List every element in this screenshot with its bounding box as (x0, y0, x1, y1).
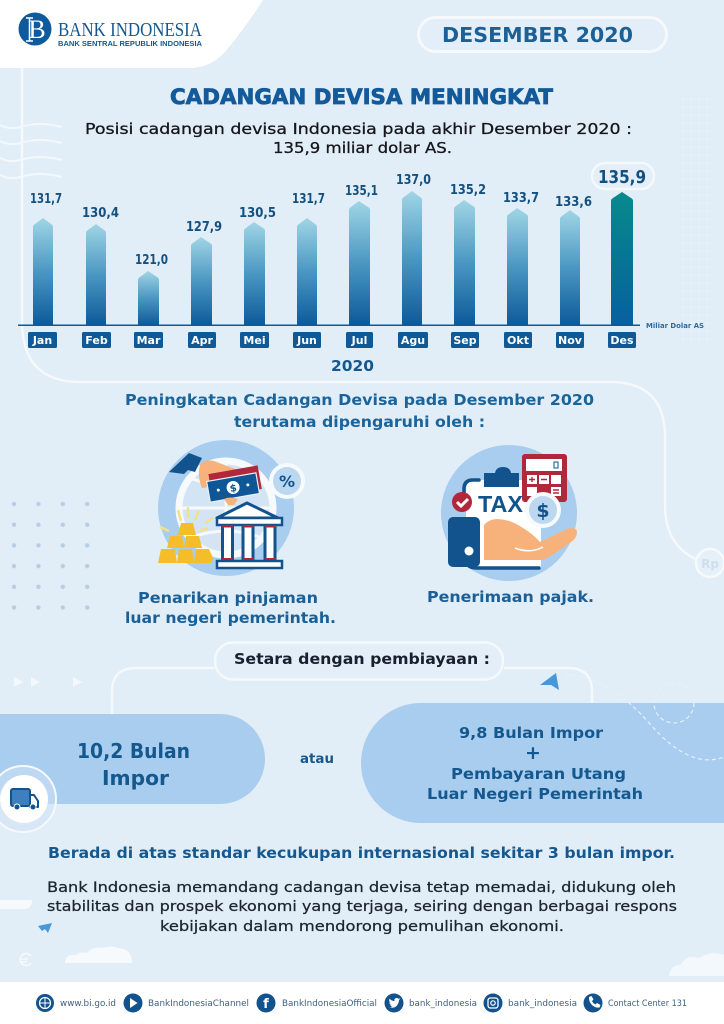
bars (33, 191, 633, 325)
sleeve (169, 453, 202, 474)
label: government loan: Penarikan pinjaman (138, 589, 318, 607)
contact center: Contact Center 131 (608, 999, 687, 1009)
value labels (30, 172, 592, 268)
icon: paper plane (540, 673, 559, 690)
axis (18, 324, 640, 326)
subtitle: Posisi cadangan devisa Indonesia pada akhir Desember 2020 : (85, 120, 632, 138)
panel: 10.2 months (0, 714, 265, 804)
gold shine (160, 507, 213, 531)
value labels: 130,4 (82, 205, 119, 221)
dashed flight path (565, 674, 724, 760)
header logo panel (0, 0, 263, 68)
youtube: BankIndonesiaChannel (148, 999, 249, 1009)
facebook (256, 994, 377, 1012)
month labels: Des (610, 334, 634, 347)
closing paragraph: Bank Indonesia memandang cadangan devisa tetap memadai, didukung oleh (47, 880, 676, 896)
panel: 9.8 months plus debt: + (525, 742, 541, 764)
financing heading pill (215, 642, 503, 680)
panel: 9.8 months plus debt: Pembayaran Utang (451, 765, 626, 783)
value labels: 121,0 (135, 252, 168, 268)
hand (484, 519, 577, 560)
panel: 10.2 months: Impor (102, 766, 169, 790)
or label: atau (300, 752, 334, 767)
website: www.bi.go.id (60, 999, 116, 1009)
panel: 9.8 months plus debt (361, 703, 724, 823)
icon: tax revenue (441, 445, 577, 581)
closing paragraph: kebijakan dalam mendorong pemulihan ekonomi. (160, 919, 564, 935)
subtitle (85, 120, 632, 157)
instagram: bank_indonesia (508, 999, 577, 1009)
month labels: Okt (507, 334, 529, 347)
panel: 10.2 months: 10,2 Bulan (77, 739, 190, 763)
month labels: Jan (32, 334, 52, 347)
banknote: $ (229, 483, 238, 495)
value labels: 127,9 (186, 219, 222, 235)
panel: 9.8 months plus debt: 9,8 Bulan Impor (459, 724, 603, 742)
subtitle: 135,9 miliar dolar AS. (273, 139, 452, 157)
bar chart (18, 163, 704, 375)
twitter: bank_indonesia (409, 999, 477, 1009)
label: tax revenue: Penerimaan pajak. (427, 588, 594, 606)
gold bars (158, 523, 213, 563)
month labels (28, 332, 636, 348)
section heading: Peningkatan Cadangan Devisa pada Desember 2020 (125, 391, 594, 409)
footer (0, 982, 724, 1024)
date badge (418, 18, 666, 52)
value labels: 133,7 (503, 190, 539, 206)
month labels: Nov (558, 334, 583, 347)
icon: Bank Indonesia logo (18, 12, 52, 46)
value labels: 131,7 (30, 191, 62, 207)
icon: tax revenue: $ (536, 500, 550, 522)
icon: government loan: % (279, 472, 295, 491)
axis unit: Miliar Dolar AS (646, 322, 704, 330)
panel: 9.8 months plus debt: Luar Negeri Pemerintah (427, 785, 643, 803)
facebook: BankIndonesiaOfficial (282, 999, 377, 1009)
title: CADANGAN DEVISA MENINGKAT (170, 85, 554, 109)
closing paragraph: stabilitas dan prospek ekonomi yang terjaga, seiring dengan berbagai respons (47, 899, 677, 915)
month labels: Apr (191, 334, 213, 347)
value labels: 135,2 (450, 182, 486, 198)
adequacy statement: Berada di atas standar kecukupan internasional sekitar 3 bulan impor. (48, 844, 675, 862)
cuff (448, 517, 480, 567)
year label: 2020 (331, 357, 374, 375)
value labels: 130,5 (239, 205, 276, 221)
website (36, 994, 116, 1012)
hand (199, 460, 246, 488)
month labels: Feb (85, 334, 108, 347)
section heading (125, 391, 594, 431)
youtube (124, 994, 249, 1012)
label: government loan (125, 589, 336, 627)
instagram (484, 994, 577, 1012)
icon: government loan (158, 440, 305, 576)
TAX word: TAX (478, 491, 524, 517)
connector lines (22, 68, 700, 714)
logo wordmark: BANK INDONESIA (58, 20, 202, 41)
icon: rupiah coin (696, 549, 724, 577)
month labels: Agu (401, 334, 425, 347)
percent badge (269, 463, 305, 499)
calculator (522, 454, 567, 502)
value labels: 135,1 (345, 183, 378, 199)
highlighted value: 135,9 (598, 167, 646, 188)
check badge (452, 492, 472, 512)
facebook: f (263, 997, 269, 1012)
clipboard (466, 480, 541, 568)
month labels: Jul (351, 334, 367, 347)
icon: Bank Indonesia logo: B (28, 15, 46, 44)
month labels: Mar (137, 334, 161, 347)
twitter (384, 994, 477, 1012)
icon: rupiah coin: Rp (701, 557, 719, 571)
value labels: 131,7 (292, 191, 325, 207)
date badge: DESEMBER 2020 (442, 23, 633, 47)
bank (217, 503, 278, 518)
banknote (205, 465, 262, 502)
logo wordmark (58, 20, 203, 48)
month labels: Mei (243, 334, 266, 347)
logo wordmark: BANK SENTRAL REPUBLIK INDONESIA (58, 39, 203, 48)
financing heading pill: Setara dengan pembiayaan : (234, 650, 490, 668)
value labels: 137,0 (396, 172, 431, 188)
section heading: terutama dipengaruhi oleh : (234, 413, 485, 431)
contact center (584, 994, 687, 1012)
label: government loan: luar negeri pemerintah. (125, 609, 336, 627)
icon: truck (0, 766, 56, 832)
month labels: Jun (296, 334, 317, 347)
closing paragraph (47, 880, 677, 935)
month labels: Sep (453, 334, 477, 347)
value labels: 133,6 (555, 194, 592, 210)
dollar badge (525, 492, 561, 528)
